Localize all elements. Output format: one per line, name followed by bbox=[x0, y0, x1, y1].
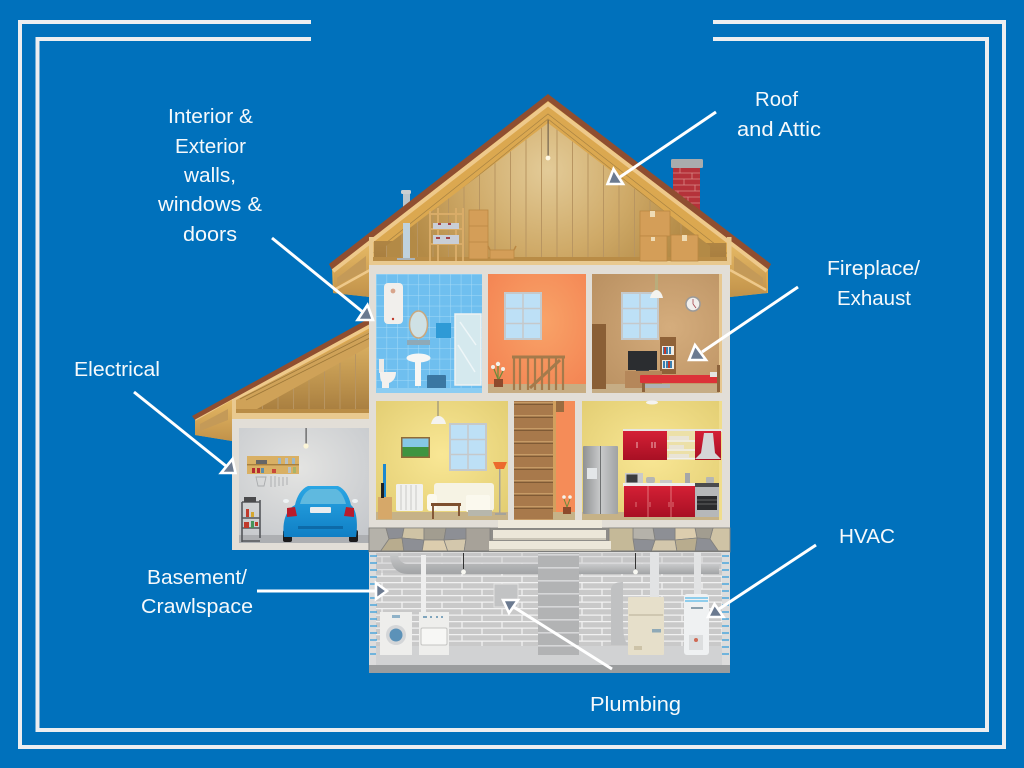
water heater bbox=[684, 552, 709, 655]
railing bbox=[512, 356, 565, 390]
living room window bbox=[449, 423, 487, 471]
pendant lamp bbox=[431, 401, 446, 424]
floor lamp bbox=[493, 462, 507, 515]
label: basement and crawlspace bbox=[141, 566, 253, 618]
main roof bbox=[329, 94, 771, 297]
mirror bbox=[407, 311, 430, 345]
label: electrical: Electrical bbox=[74, 358, 160, 381]
arrow: roof and attic bbox=[608, 112, 716, 184]
label: basement and crawlspace: Basement/ bbox=[147, 566, 247, 589]
garage roof bbox=[192, 319, 370, 441]
stove bbox=[695, 477, 719, 517]
bedroom window bbox=[621, 292, 659, 340]
counter items bbox=[646, 473, 690, 483]
arrow: electrical bbox=[134, 392, 236, 473]
garage tools bbox=[256, 476, 287, 487]
basement lights bbox=[461, 553, 638, 574]
electrical panel bbox=[494, 584, 518, 607]
label: roof and attic: Roof bbox=[755, 88, 798, 111]
waterproofing strips bbox=[370, 556, 729, 654]
basement stairs bbox=[538, 553, 579, 655]
sink bbox=[406, 354, 430, 386]
fridge bbox=[583, 446, 618, 514]
dryer bbox=[419, 612, 449, 655]
range hood bbox=[695, 433, 721, 459]
garage light bbox=[303, 428, 309, 449]
kitchen bbox=[582, 400, 722, 520]
attic boxes left bbox=[469, 210, 516, 259]
foundation slab bbox=[369, 665, 730, 673]
garage pegboard shelf bbox=[247, 456, 299, 474]
toilet bbox=[379, 359, 396, 390]
plant bbox=[491, 362, 505, 387]
label: fireplace and exhaust: Exhaust bbox=[837, 287, 911, 310]
label: basement and crawlspace: Crawlspace bbox=[141, 595, 253, 618]
label: interior and exterior walls: Interior & bbox=[168, 105, 253, 128]
label: roof and attic: and Attic bbox=[737, 118, 821, 141]
basement floor bbox=[376, 646, 722, 665]
pendant lamp bbox=[650, 274, 663, 298]
attic interior bbox=[370, 120, 730, 266]
house walls bbox=[369, 265, 730, 528]
coffee table bbox=[431, 503, 461, 519]
ceiling light bbox=[646, 400, 658, 404]
ductwork bbox=[390, 553, 719, 645]
bedroom bbox=[592, 274, 722, 393]
wall clock bbox=[686, 297, 700, 311]
house illustration bbox=[192, 94, 771, 673]
front steps bbox=[489, 520, 611, 551]
towel bbox=[436, 323, 451, 338]
staircase bbox=[514, 401, 575, 520]
radiator bbox=[396, 484, 423, 511]
label: roof and attic bbox=[737, 88, 821, 141]
garage rack bbox=[242, 497, 260, 542]
laundry basket bbox=[427, 375, 446, 389]
picture bbox=[401, 437, 430, 458]
door bbox=[592, 324, 606, 389]
tv and stand bbox=[378, 464, 392, 519]
label: interior and exterior walls bbox=[157, 105, 262, 246]
label: plumbing: Plumbing bbox=[590, 693, 681, 716]
attic pipe bbox=[397, 223, 415, 260]
label: interior and exterior walls: windows & bbox=[157, 193, 262, 216]
arrow: interior and exterior walls bbox=[272, 238, 373, 320]
attic boxes right bbox=[640, 211, 698, 261]
arrow: hvac bbox=[708, 545, 816, 617]
desk bbox=[625, 371, 662, 388]
chimney bbox=[671, 159, 703, 217]
label: fireplace and exhaust bbox=[827, 257, 920, 310]
attic light bulb bbox=[546, 120, 550, 160]
bookcase bbox=[660, 337, 676, 374]
label: interior and exterior walls: doors bbox=[183, 223, 237, 246]
label: interior and exterior walls: Exterior bbox=[175, 135, 246, 158]
shower bbox=[455, 314, 481, 385]
label: fireplace and exhaust: Fireplace/ bbox=[827, 257, 920, 280]
bed bbox=[640, 365, 720, 392]
car bbox=[283, 486, 358, 542]
garage bbox=[232, 419, 372, 550]
attic shelf bbox=[430, 208, 463, 261]
boiler bbox=[384, 283, 403, 324]
bathroom bbox=[376, 274, 482, 393]
counter and base cabinets bbox=[623, 483, 695, 517]
basement bbox=[369, 552, 730, 673]
upstairs landing bbox=[488, 274, 586, 393]
arrow: plumbing bbox=[503, 600, 612, 669]
tv bbox=[628, 351, 657, 372]
roof vent pipe bbox=[401, 190, 411, 216]
stone foundation bbox=[369, 528, 730, 552]
plant bbox=[562, 495, 572, 514]
landing window bbox=[504, 292, 542, 340]
label: interior and exterior walls: walls, bbox=[183, 164, 236, 187]
washer bbox=[380, 612, 412, 655]
arrow: fireplace and exhaust bbox=[689, 287, 798, 360]
living room bbox=[376, 401, 508, 520]
arrow: basement and crawlspace bbox=[257, 583, 387, 599]
label: hvac: HVAC bbox=[839, 525, 895, 548]
upper cabinets bbox=[623, 429, 722, 460]
microwave bbox=[625, 473, 643, 484]
furnace bbox=[628, 552, 664, 655]
sofa bbox=[427, 483, 494, 516]
